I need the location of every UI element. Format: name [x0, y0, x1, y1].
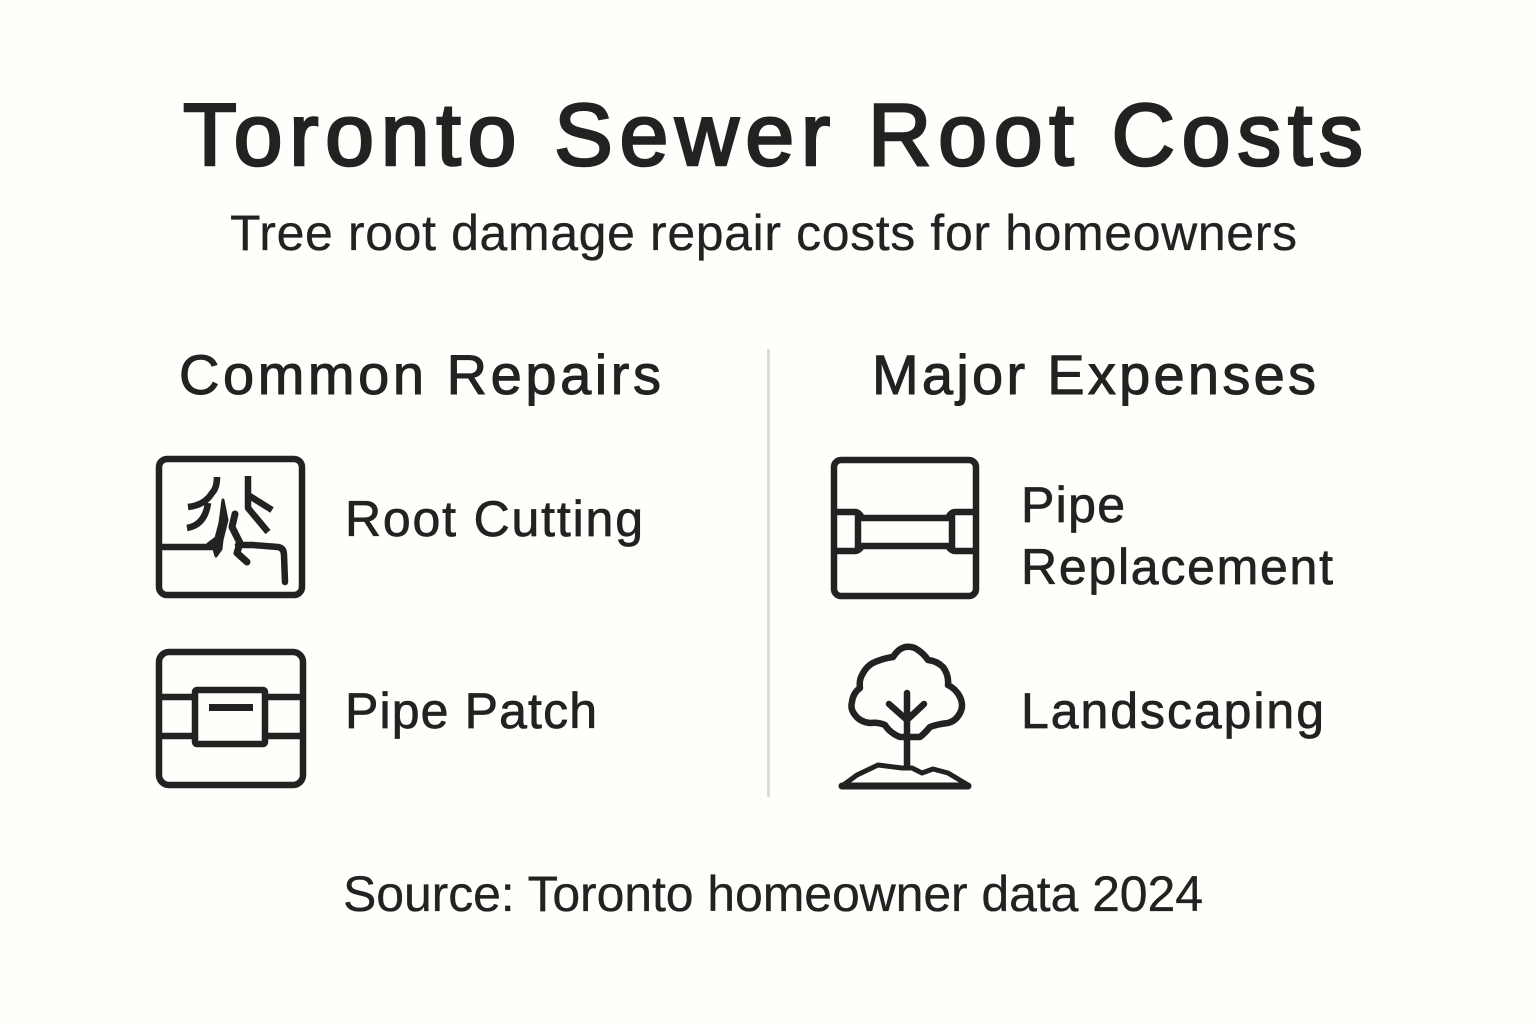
source note: Source: Toronto homeowner data 2024 [343, 866, 1203, 922]
heading: common repairs: Common Repairs [179, 343, 661, 406]
title: Toronto Sewer Root Costs [183, 85, 1363, 184]
divider [767, 349, 770, 797]
icon: tree [842, 647, 968, 786]
icon: pipe replacement [834, 460, 976, 596]
label: pipe patch: Pipe Patch [345, 683, 597, 739]
icon: root cutting [159, 459, 302, 595]
subtitle: Tree root damage repair costs for homeowners [230, 205, 1297, 261]
panel: major expenses [834, 343, 1333, 786]
label: pipe replacement second line: Replacement [1021, 539, 1333, 595]
icon: pipe patch [159, 652, 303, 785]
label: pipe replacement: Pipe [1021, 477, 1125, 533]
label: root cutting: Root Cutting [345, 491, 643, 547]
label: landscaping: Landscaping [1021, 683, 1324, 739]
heading: major expenses: Major Expenses [872, 343, 1316, 406]
panel: common repairs [159, 343, 661, 785]
